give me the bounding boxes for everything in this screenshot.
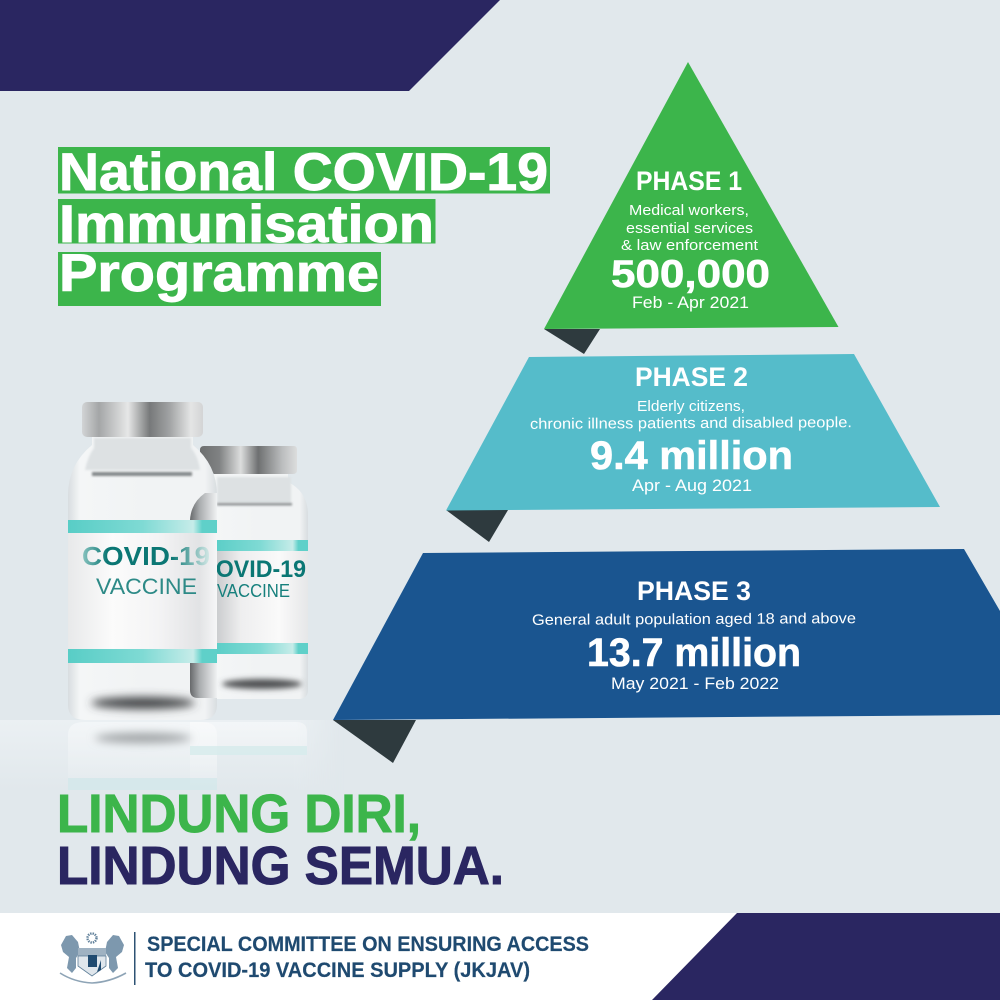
floor reflection surface bbox=[0, 720, 303, 734]
phase 2 text: 9.4 million bbox=[590, 434, 793, 478]
front vial cap bbox=[82, 402, 203, 437]
back vial bbox=[199, 446, 308, 699]
phase 3 text bbox=[532, 576, 856, 693]
emblem shield bbox=[78, 948, 106, 976]
phase 3 text: May 2021 - Feb 2022 bbox=[611, 674, 779, 693]
phase 1 text: PHASE 1 bbox=[636, 166, 742, 196]
back vial label text: VACCINE bbox=[217, 581, 290, 601]
title text: Immunisation bbox=[59, 195, 434, 254]
vaccine vials bbox=[0, 402, 345, 790]
back vial seen through glass bbox=[190, 493, 217, 698]
front vial bbox=[68, 402, 217, 720]
front vial shoulder shade bbox=[85, 438, 200, 470]
back vial label text: COVID-19 bbox=[199, 556, 306, 583]
phase 3 text: 13.7 million bbox=[587, 631, 801, 675]
back vial label bbox=[212, 540, 308, 654]
title text: Programme bbox=[59, 244, 379, 303]
emblem star bbox=[88, 934, 96, 942]
phase 3 fold bbox=[333, 720, 416, 763]
back vial shoulder shade bbox=[217, 477, 291, 503]
phase 3 tier bbox=[333, 549, 1000, 763]
back vial liquid shadow bbox=[222, 679, 302, 689]
front vial glass body bbox=[68, 437, 217, 720]
phase 1 text: essential services bbox=[626, 220, 753, 237]
phase 2 fold bbox=[446, 510, 508, 542]
slogan line 1: LINDUNG DIRI, bbox=[57, 784, 421, 844]
title highlight bars bbox=[58, 147, 550, 306]
committee name bbox=[145, 933, 589, 982]
committee name: SPECIAL COMMITTEE ON ENSURING ACCESS bbox=[147, 933, 589, 956]
icon: coat of arms bbox=[60, 934, 126, 983]
front vial liquid shadow bbox=[91, 697, 195, 709]
front vial neck line bbox=[92, 472, 192, 476]
slogan bbox=[57, 784, 504, 896]
phase 1 text: 500,000 bbox=[611, 253, 770, 296]
back vial cap bbox=[200, 446, 297, 474]
phase 1 text: Feb - Apr 2021 bbox=[632, 293, 749, 312]
back vial neck line bbox=[217, 503, 292, 506]
emblem tigers bbox=[61, 935, 124, 973]
phase 2 trapezoid bbox=[446, 354, 940, 510]
top navy banner bbox=[0, 0, 500, 91]
title bbox=[58, 143, 550, 306]
front vial label bbox=[68, 520, 217, 663]
back vial stripes bbox=[212, 540, 308, 654]
title text: National COVID-19 bbox=[59, 143, 548, 202]
front vial label text: COVID-19 bbox=[82, 541, 210, 571]
phase 2 text: Elderly citizens, bbox=[637, 398, 745, 415]
phase 1 tier bbox=[544, 62, 838, 354]
phase 1 triangle bbox=[544, 62, 838, 329]
phase 1 text: Medical workers, bbox=[629, 202, 749, 219]
front vial label text: VACCINE bbox=[96, 574, 197, 599]
footer divider bbox=[134, 932, 136, 985]
vial reflections bbox=[68, 722, 307, 790]
footer navy corner bbox=[652, 913, 1000, 1000]
phase 1 text: & law enforcement bbox=[621, 237, 759, 254]
back vial label text bbox=[217, 560, 306, 597]
footer band bbox=[0, 913, 1000, 1000]
title text bbox=[59, 143, 548, 303]
slogan line 2: LINDUNG SEMUA. bbox=[57, 836, 504, 896]
back vial body bbox=[205, 474, 308, 699]
phase 1 text bbox=[611, 166, 770, 312]
phase 2 text: PHASE 2 bbox=[635, 362, 748, 392]
phase 2 text: chronic illness patients and disabled people. bbox=[530, 414, 852, 433]
phase 3 ribbon bbox=[333, 549, 1000, 720]
phase 3 text: General adult population aged 18 and above bbox=[532, 610, 856, 629]
committee name: TO COVID-19 VACCINE SUPPLY (JKJAV) bbox=[145, 959, 530, 982]
phase 1 fold bbox=[544, 329, 600, 354]
emblem ribbon bbox=[60, 973, 126, 983]
footer white background bbox=[0, 913, 1000, 1000]
phase 2 tier bbox=[446, 354, 940, 542]
front vial stripes bbox=[68, 520, 217, 663]
phase 3 text: PHASE 3 bbox=[637, 576, 751, 606]
front vial label text bbox=[83, 546, 209, 594]
phase 2 text: Apr - Aug 2021 bbox=[632, 476, 752, 495]
phase 2 text bbox=[530, 362, 852, 495]
